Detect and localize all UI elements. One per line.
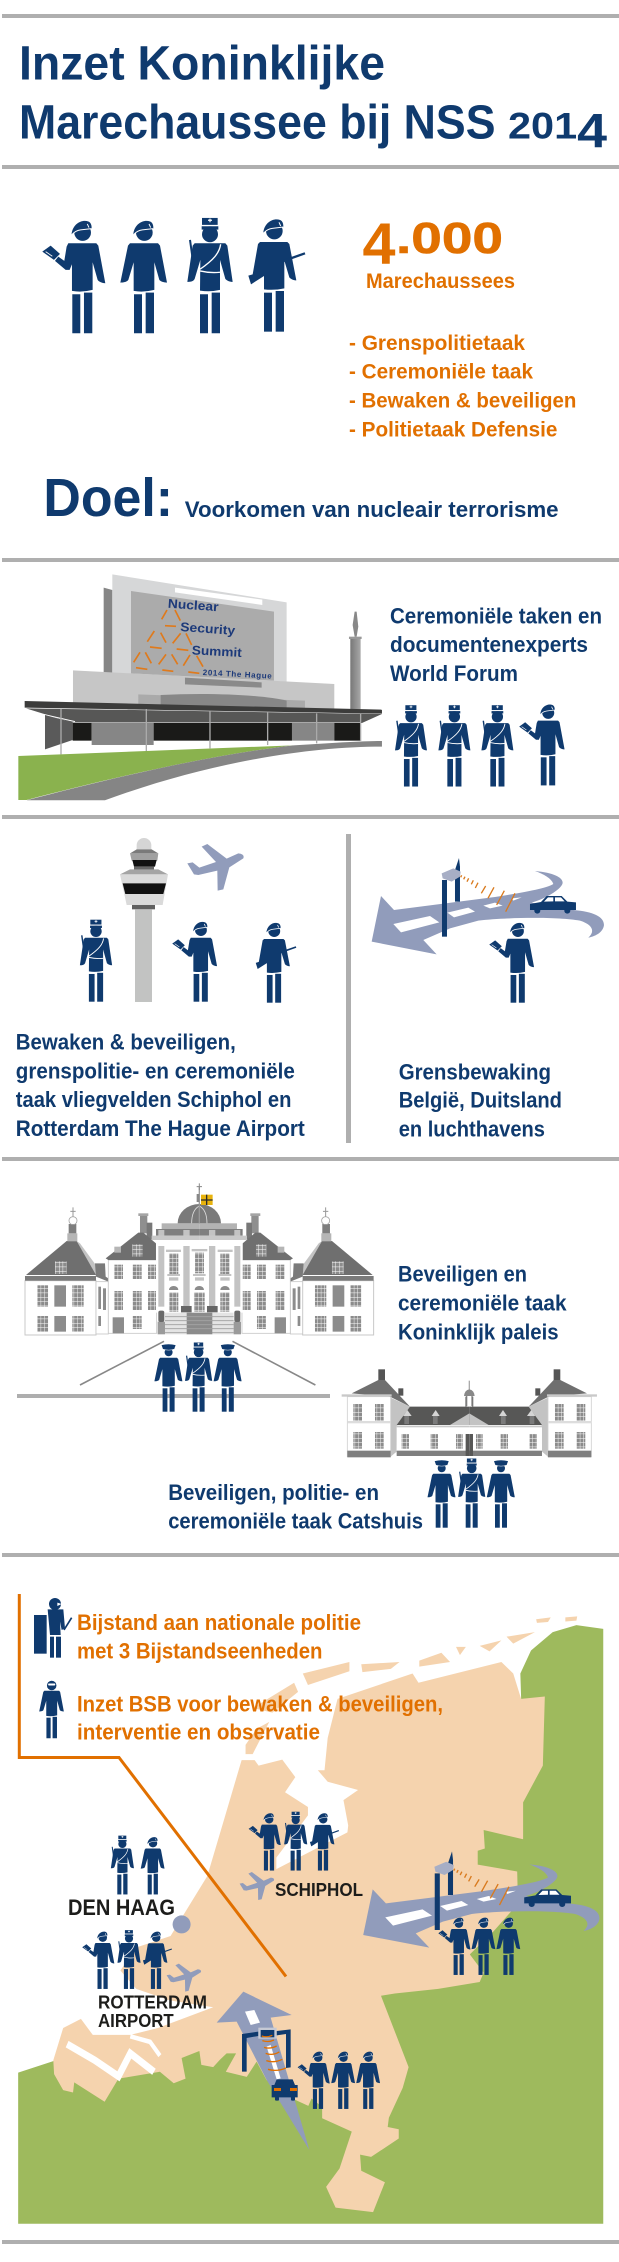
text: airports (16, 1029, 305, 1141)
ground line (17, 1341, 330, 1398)
title: 4 (577, 106, 607, 158)
legend text: Bijstand: met 3 Bijstandseenheden (77, 1638, 322, 1663)
heading: World Forum tasks: Ceremoniële taken en (390, 604, 602, 628)
Schiphol figures (249, 1812, 339, 1871)
text: palace: ceremoniële taak (398, 1291, 567, 1316)
number: 4.000: .000 (396, 214, 503, 263)
label: Rotterdam Airport (98, 1993, 207, 2031)
panel: airport tower (120, 838, 168, 1002)
legend callout line (19, 1594, 286, 1976)
text: palace (398, 1262, 567, 1344)
text: border: en luchthavens (399, 1116, 545, 1141)
task list: - Grenspolitietaak (349, 331, 525, 355)
legend text: Bijstand (77, 1610, 361, 1663)
text: airports: grenspolitie- en ceremoniële (16, 1058, 295, 1084)
text: border: België, Duitsland (399, 1088, 562, 1113)
south border arrow and gantry (217, 1992, 309, 2150)
task list: - Ceremoniële taak (349, 360, 533, 384)
palace figures (154, 1342, 242, 1412)
rule (2, 1157, 619, 1161)
goal (43, 468, 559, 528)
legend text: BSB: Inzet BSB voor bewaken & beveiligen, (77, 1691, 443, 1716)
task list (349, 331, 576, 441)
panel: marechaussee figures (42, 218, 305, 333)
icon: plane Rotterdam (167, 1964, 201, 1992)
number: 4.000: 4 (362, 212, 396, 277)
bottom rule (2, 2240, 619, 2244)
label: Rotterdam Airport: ROTTERDAM (98, 1993, 207, 2013)
icon: BSB officer (39, 1681, 64, 1738)
text: Catshuis (168, 1480, 423, 1534)
panel: World Forum building (18, 574, 382, 800)
icon: riot shield officer (34, 1598, 72, 1658)
panel: World Forum building: Security (180, 620, 236, 638)
text: airports: Bewaken & beveiligen, (16, 1029, 236, 1054)
divider (346, 834, 351, 1143)
border figure (489, 923, 534, 1003)
east border road (363, 1851, 599, 1948)
title: Marechaussee bij NSS (19, 96, 496, 150)
rule (2, 1553, 619, 1557)
text: border: Grensbewaking (399, 1059, 551, 1084)
panel: royal palace (25, 1183, 374, 1335)
Rotterdam figures (82, 1930, 172, 1989)
goal: Voorkomen van nucleair terrorisme (185, 497, 559, 522)
marker: Den Haag (173, 1915, 191, 1933)
Den Haag figures (111, 1836, 165, 1894)
icon: plane Schiphol (240, 1872, 274, 1900)
title: Inzet Koninklijke (19, 38, 385, 90)
task list: - Bewaken & beveiligen (349, 388, 576, 412)
task list: - Politietaak Defensie (349, 417, 557, 441)
text: palace: Beveiligen en (398, 1262, 527, 1287)
label: Rotterdam Airport: AIRPORT (98, 2011, 174, 2031)
text: Catshuis: ceremoniële taak Catshuis (168, 1509, 423, 1534)
title (19, 38, 607, 158)
panel: Catshuis (342, 1369, 597, 1457)
label: Den Haag: DEN HAAG (68, 1895, 175, 1920)
goal: Doel: (43, 468, 173, 528)
icon: plane (187, 844, 244, 891)
rule (2, 815, 619, 819)
legend text: Bijstand: Bijstand aan nationale politie (77, 1610, 361, 1635)
title: 201 (508, 106, 570, 146)
text: airports: Rotterdam The Hague Airport (16, 1116, 305, 1141)
heading: World Forum tasks: documentenexperts (390, 632, 588, 657)
label: Marechaussees: Marechaussees (366, 269, 515, 293)
airport figures (80, 920, 296, 1003)
heading: World Forum tasks: World Forum (390, 661, 518, 686)
text: border (399, 1059, 562, 1141)
label: Schiphol: SCHIPHOL (275, 1880, 363, 1900)
text: palace: Koninklijk paleis (398, 1319, 559, 1344)
legend text: BSB: interventie en observatie (77, 1719, 320, 1744)
text: airports: taak vliegvelden Schiphol en (16, 1087, 291, 1112)
title rule (2, 165, 619, 169)
east figures (438, 1918, 520, 1975)
top rule (2, 14, 619, 18)
panel: World Forum building: 2014 The Hague (203, 668, 272, 681)
number: 4.000 (362, 212, 503, 277)
panel: border road (372, 858, 604, 954)
panel: World Forum building: Nuclear (167, 597, 219, 614)
heading: World Forum tasks (390, 604, 602, 686)
World Forum figures (395, 705, 565, 787)
text: Catshuis: Beveiligen, politie- en (168, 1480, 379, 1505)
south figures (298, 2052, 380, 2109)
panel: World Forum building: Summit (191, 643, 243, 660)
Catshuis figures (428, 1458, 515, 1528)
panel: map of the Netherlands (18, 1616, 603, 2224)
legend text: BSB (77, 1691, 443, 1744)
rule (2, 558, 619, 562)
